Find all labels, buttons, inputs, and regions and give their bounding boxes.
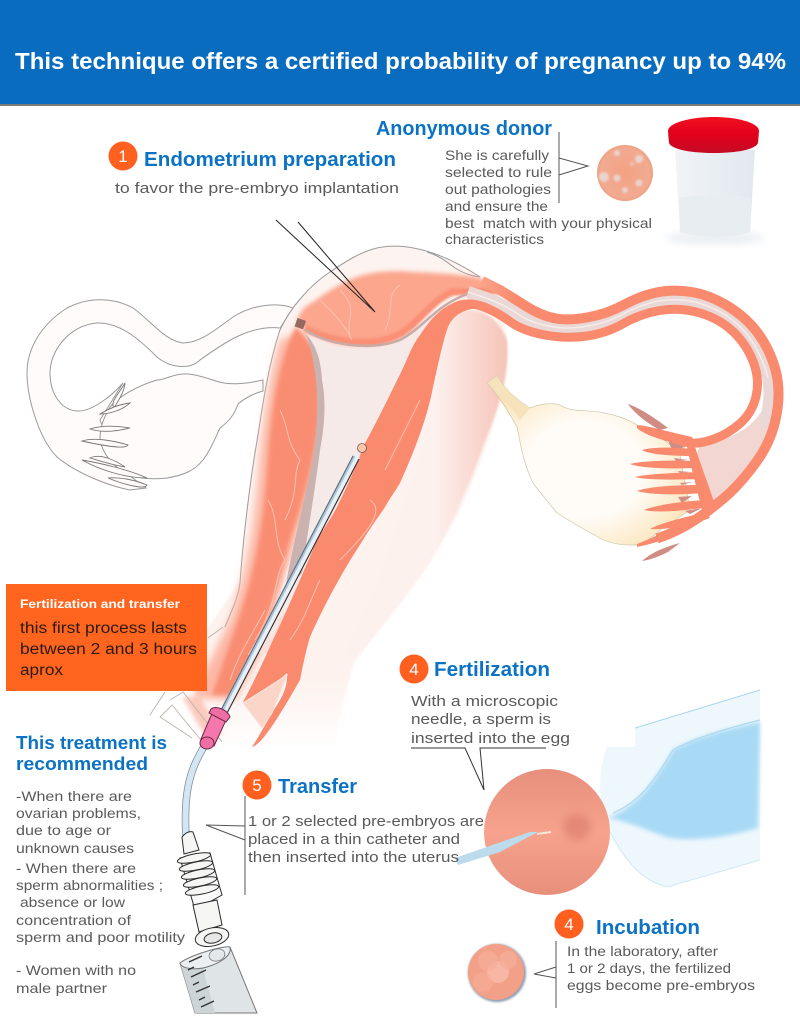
cavity grey left strip — [285, 334, 324, 590]
callout text: this first process lasts — [20, 620, 187, 637]
recommendation list — [16, 788, 185, 996]
description: In the laboratory, after — [567, 943, 718, 959]
donor text — [445, 147, 652, 247]
recommendation list: - When there are — [16, 860, 136, 876]
tube lumen light line — [468, 292, 768, 378]
recommendation list: sperm abnormalities ; — [16, 877, 163, 893]
right uterus side shade — [345, 310, 507, 660]
callout heading: Fertilization and transfer — [20, 597, 180, 611]
illustration: right ovary — [487, 376, 690, 545]
fundus — [297, 271, 500, 345]
finger 1 — [642, 448, 694, 456]
badge 1: 1 — [118, 147, 128, 166]
left wall outer fade — [192, 330, 323, 700]
illustration: uterus — [150, 246, 508, 753]
heading: Transfer — [278, 776, 357, 798]
badge 4: 4 — [564, 915, 574, 934]
callout text: aprox — [20, 662, 63, 679]
description: then inserted into the uterus — [248, 849, 459, 866]
donor egg — [597, 145, 653, 201]
large egg — [455, 769, 610, 895]
description: 1 or 2 selected pre-embryos are — [248, 813, 484, 830]
heading: anonymous donor: Anonymous donor — [376, 118, 552, 140]
specimen cup — [665, 117, 765, 245]
left fimbriae — [82, 383, 147, 487]
step 4: incubation — [554, 910, 755, 993]
uterus body — [190, 246, 508, 753]
recommendation list: - Women with no — [16, 962, 136, 978]
finger 2 — [630, 461, 696, 468]
incubation bracket — [534, 941, 556, 1008]
recommendation list: sperm and poor motility — [16, 929, 185, 945]
callout text: between 2 and 3 hours — [20, 641, 197, 658]
right uterine wall — [243, 302, 478, 747]
step 5: transfer bracket — [206, 796, 245, 895]
lumen widening — [697, 407, 772, 510]
tube opening — [295, 318, 306, 329]
description — [567, 943, 755, 993]
tube lumen — [468, 292, 770, 428]
description: inserted into the egg — [411, 730, 570, 747]
step 1: endometrium preparation — [108, 142, 399, 197]
callout text — [20, 620, 197, 679]
heading: this treatment is recommended: This treatment is — [16, 733, 167, 753]
description: eggs become pre-embryos — [567, 977, 755, 993]
recommendation list: absence or low — [20, 894, 126, 910]
heading: Fertilization — [434, 659, 550, 681]
fimbriae dark folds — [628, 404, 702, 561]
pipette — [600, 690, 760, 887]
donor bracket — [559, 132, 588, 203]
uterus outline — [225, 246, 480, 627]
badge 1 — [108, 142, 138, 170]
step 5: transfer — [242, 770, 484, 866]
connector — [177, 832, 230, 949]
pointer: endometrium — [276, 220, 375, 312]
vessels — [230, 285, 420, 680]
recommendation list: concentration of — [16, 912, 131, 928]
recommendation list: male partner — [16, 980, 107, 996]
heading: Incubation — [596, 917, 700, 939]
header banner — [0, 0, 800, 106]
donor text: and ensure the — [445, 198, 548, 214]
syringe — [180, 947, 257, 1013]
fundus lumen line — [305, 293, 470, 346]
left uterine wall — [212, 326, 321, 695]
small pre-embryo — [468, 944, 526, 1002]
description: to favor the pre-embryo implantation — [115, 180, 399, 197]
left fallopian tube — [27, 300, 293, 490]
fundus lower deep tone — [305, 290, 500, 342]
left ovary — [100, 374, 263, 479]
illustration: fimbriae — [628, 404, 717, 561]
heading: this treatment is recommended: recommended — [16, 754, 148, 774]
description: needle, a sperm is — [411, 711, 551, 728]
donor text: She is carefully — [445, 147, 549, 163]
tube outer band — [482, 281, 779, 538]
description — [248, 813, 484, 866]
finger 5 — [644, 500, 708, 511]
pre-embryo near catheter tip — [358, 444, 366, 452]
flap — [243, 675, 287, 728]
donor text: characteristics — [445, 231, 544, 247]
illustration: left fallopian tube and ovary outline — [27, 300, 293, 490]
description — [411, 693, 570, 747]
donor text: out pathologies — [445, 181, 551, 197]
badge 4 — [400, 654, 428, 684]
catheter — [185, 456, 359, 836]
badge 5: 5 — [252, 776, 262, 795]
recommendation list: unknown causes — [16, 840, 134, 856]
donor text: selected to rule — [445, 164, 552, 180]
description: placed in a thin catheter and — [248, 831, 460, 848]
description: With a microscopic — [411, 693, 559, 710]
heading: Endometrium preparation — [144, 149, 396, 171]
fertilization callout pointer — [411, 748, 546, 790]
tube inner band — [445, 304, 758, 443]
donor text: best match with your physical — [445, 215, 652, 231]
flexible tube — [185, 745, 205, 836]
description: 1 or 2 days, the fertilized — [567, 960, 731, 976]
vaginal outlines — [150, 627, 223, 745]
fimbriae band — [637, 425, 717, 547]
illustration: right fallopian tube — [445, 281, 779, 538]
recommendation list: -When there are — [16, 788, 132, 804]
recommendation list: due to age or — [16, 822, 111, 838]
finger 4 — [637, 485, 704, 494]
title: This technique offers a certified probability of pregnancy up to 94% — [15, 48, 786, 74]
lower left shadow — [182, 697, 222, 735]
badge 4 — [554, 910, 584, 938]
cup lid — [668, 117, 759, 153]
uterine cavity — [262, 293, 470, 655]
finger 3 — [635, 472, 700, 480]
cavity lower folds — [248, 612, 285, 655]
badge 5 — [242, 770, 272, 800]
callout: fertilization and transfer — [6, 584, 207, 691]
badge 4: 4 — [409, 660, 419, 679]
needle — [455, 832, 538, 865]
finger 6 — [650, 512, 710, 529]
heading: this treatment is recommended — [16, 733, 167, 774]
pink sleeve — [200, 708, 230, 749]
step 4: fertilization — [400, 654, 570, 747]
recommendation list: ovarian problems, — [16, 805, 141, 821]
